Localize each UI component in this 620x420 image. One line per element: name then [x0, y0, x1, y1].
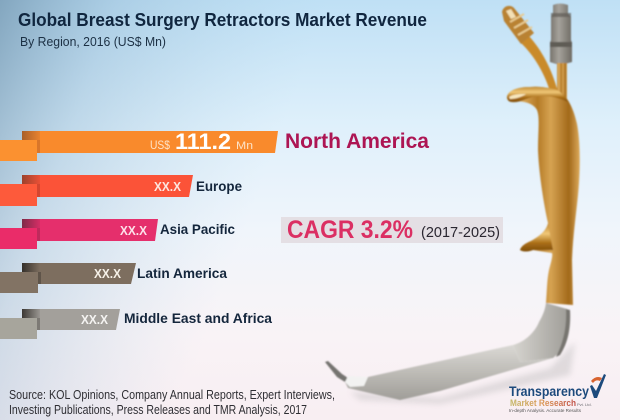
value: Europe: XX.X: [154, 179, 181, 194]
tip highlight: [509, 94, 526, 99]
icon: breast surgery retractor: [325, 4, 580, 404]
value: North America: US$: [150, 138, 170, 152]
label: Europe: Europe: [196, 178, 242, 194]
gold handle: [507, 87, 580, 305]
logo: Transparency Market Research: Market Research: [510, 398, 576, 409]
logo: Transparency Market Research: Pvt. Ltd.: [577, 402, 592, 407]
knurled side tube: [502, 6, 558, 95]
value: Latin America: XX.X: [94, 266, 121, 281]
grey connector knob: [550, 4, 572, 64]
source note: Investing Publications, Press Releases and TMR Analysis, 2017: [9, 403, 307, 417]
logo: Transparency Market Research: [509, 374, 606, 413]
steel upright: [513, 303, 567, 362]
bar: Middle East and Africa: [0, 309, 120, 339]
steel blade: [345, 345, 553, 400]
value: 111.2: 111.2: [175, 129, 231, 154]
icon: check mark: [590, 374, 606, 398]
source note: Source: KOL Opinions, Company Annual Reports, Expert Interviews,: [9, 388, 335, 402]
CAGR period: (2017-2025): [421, 224, 500, 241]
blade lip: [325, 361, 348, 382]
value: Asia Pacific: XX.X: [120, 223, 147, 238]
bar: Europe: [0, 175, 193, 206]
source note: [9, 388, 335, 417]
bar: North America: [0, 131, 278, 161]
label: North America: North America: [285, 130, 429, 153]
label: Latin America: Latin America: [137, 265, 227, 281]
logo: Transparency Market Research: Transparency: [509, 383, 589, 399]
gold stem: [557, 63, 567, 100]
label: Middle East and Africa: Middle East and Africa: [124, 310, 272, 326]
value: Middle East and Africa: XX.X: [81, 312, 108, 327]
subtitle: By Region, 2016 (US$ Mn): [20, 34, 166, 49]
callout: CAGR: [281, 216, 503, 244]
title: Global Breast Surgery Retractors Market Revenue: [18, 10, 427, 30]
label: Asia Pacific: Asia Pacific: [160, 221, 235, 237]
toe highlight: [520, 224, 553, 252]
handle highlight top: [507, 87, 568, 102]
bar: Latin America: [0, 263, 136, 293]
unit: Mn: Mn: [236, 140, 253, 152]
logo: Transparency Market Research: In-depth Analysis. Accurate Results: [509, 408, 582, 413]
CAGR value: CAGR 3.2%: [287, 216, 413, 244]
bar: Asia Pacific: [0, 219, 158, 249]
blade shadow: [350, 342, 575, 404]
